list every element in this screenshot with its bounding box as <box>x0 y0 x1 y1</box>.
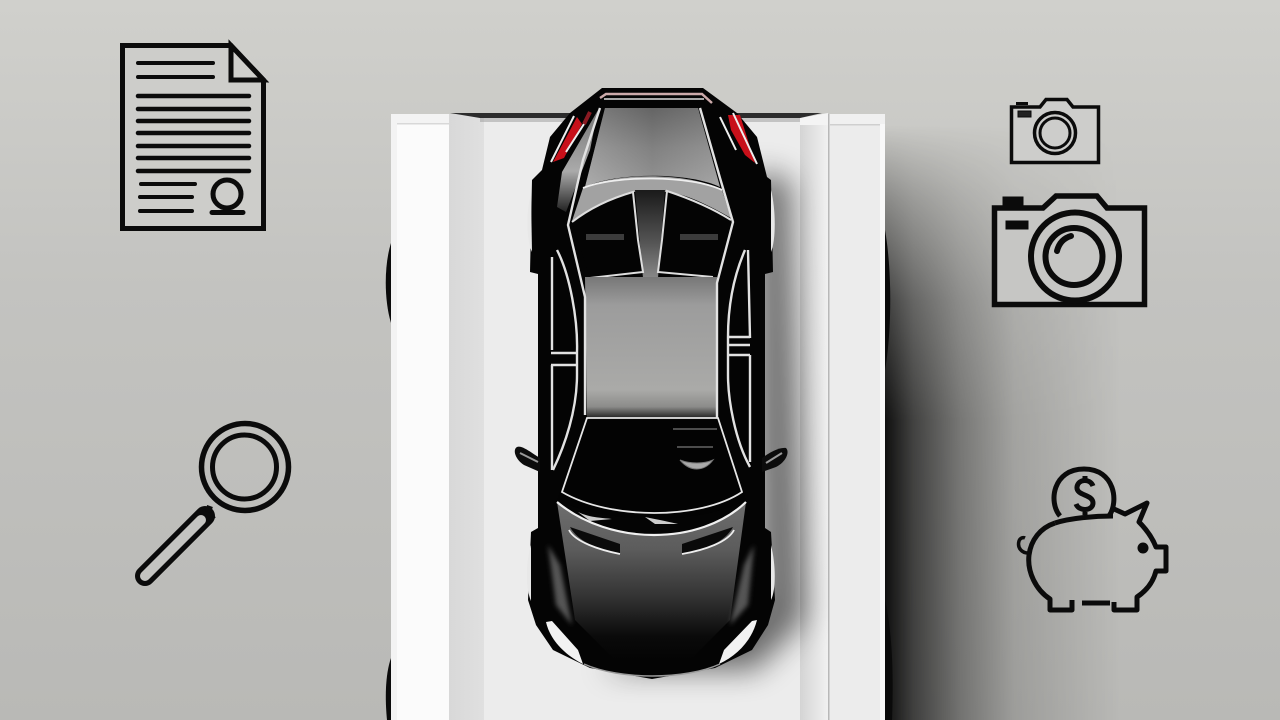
hood <box>548 502 754 660</box>
rear pillar reflections <box>557 110 598 212</box>
roof panel <box>585 277 717 418</box>
mirrors <box>515 447 788 472</box>
windshield <box>557 418 746 519</box>
side rails <box>551 108 750 470</box>
tail lights <box>551 94 757 164</box>
car shadow <box>600 170 804 670</box>
icon: document with seal <box>122 46 264 228</box>
icon: magnifying glass <box>145 424 288 576</box>
icon: small camera <box>1012 100 1098 162</box>
hood vents <box>570 527 620 554</box>
rear quarter windows <box>572 190 731 278</box>
headlights <box>546 620 757 676</box>
icon: large camera <box>994 196 1144 304</box>
paper sheet under the car <box>386 113 893 720</box>
wheel arches highlights <box>527 190 775 601</box>
dark edges behind the sheet <box>386 230 893 720</box>
icon: piggy bank with coin <box>1019 469 1166 610</box>
car <box>515 88 804 679</box>
rear window <box>585 108 720 187</box>
car body silhouette <box>528 88 775 679</box>
rear window frame band <box>572 176 731 221</box>
